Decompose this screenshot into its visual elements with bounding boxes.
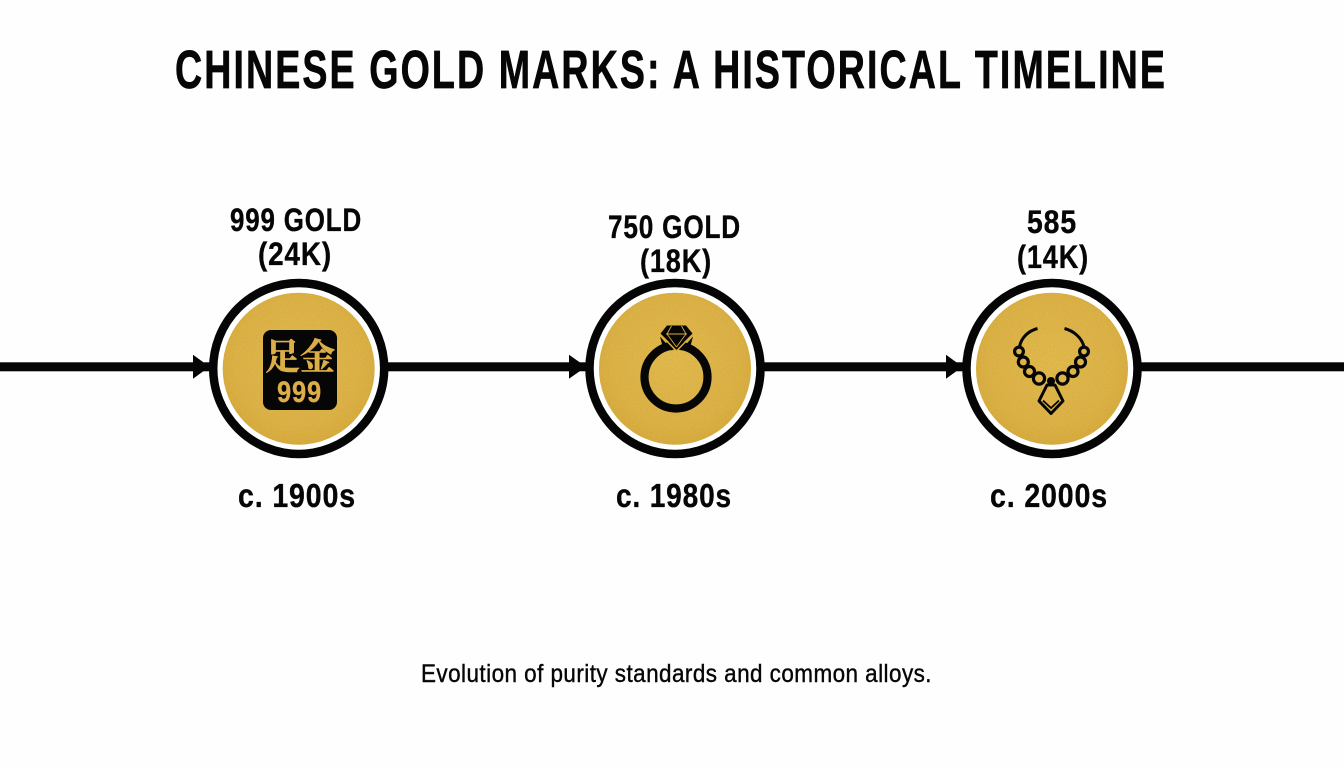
arrowhead (569, 355, 586, 379)
label: 585 14K (1017, 204, 1089, 275)
label: 750 gold 18K: 750 GOLD (608, 209, 741, 245)
date: c. 1980s (616, 477, 732, 514)
gold medallion (966, 283, 1138, 454)
arrowhead (193, 355, 210, 379)
milestone: 999 gold, c. 1900s (193, 202, 384, 514)
label: 750 gold 18K (608, 209, 741, 279)
label: 999 gold 24K: (24K) (258, 236, 332, 272)
label: 999 gold 24K (230, 202, 362, 272)
timeline line (0, 362, 1344, 371)
gold medallion (590, 283, 760, 454)
icon: diamond ring (644, 326, 708, 408)
label: 999 gold 24K: 999 GOLD (230, 202, 362, 238)
gold medallion (213, 283, 384, 454)
label: 750 gold 18K: (18K) (640, 243, 712, 279)
icon: hallmark stamp (263, 329, 337, 410)
icon: hallmark stamp: 足金 (265, 329, 335, 380)
label: 585 14K: 585 (1027, 204, 1077, 240)
milestone: 585, c. 2000s (946, 204, 1138, 514)
date: c. 2000s (990, 477, 1108, 514)
caption: Evolution of purity standards and common alloys. (421, 660, 932, 688)
date: c. 1900s (238, 477, 356, 514)
milestone: 750 gold, c. 1980s (569, 209, 760, 514)
label: 585 14K: (14K) (1017, 239, 1089, 275)
icon: hallmark stamp: 999 (277, 376, 322, 409)
arrowhead (946, 355, 962, 379)
icon: necklace (1015, 328, 1088, 414)
